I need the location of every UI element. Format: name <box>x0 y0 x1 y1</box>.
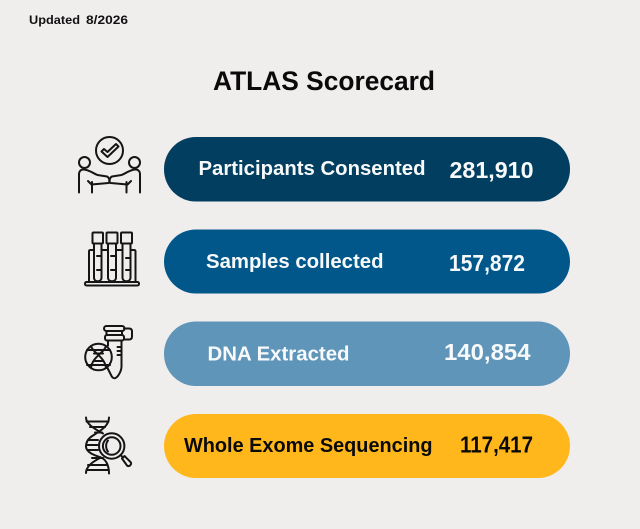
row: participants consented <box>79 137 570 202</box>
value: exome: 117,417 <box>460 432 533 458</box>
icon: test tube rack <box>85 232 139 286</box>
value: DNA: 140,854 <box>444 339 531 365</box>
value: samples: 157,872 <box>449 250 525 276</box>
value: participants: 281,910 <box>450 157 534 183</box>
pill: DNA <box>164 322 570 386</box>
pill: samples <box>164 230 570 294</box>
label: samples collected: Samples collected <box>206 251 384 273</box>
label: participants consented: Participants Consented <box>198 158 426 180</box>
pill: participants <box>164 137 570 202</box>
row: DNA extracted <box>85 322 570 386</box>
icon: handshake with check <box>79 137 140 192</box>
update date <box>29 15 128 27</box>
update date: Updated <box>29 15 80 27</box>
update date: 8/2026 <box>86 15 128 27</box>
icon: DNA with magnifier <box>86 418 131 474</box>
row: samples collected <box>85 230 570 294</box>
row: whole exome sequencing <box>86 414 570 478</box>
icon: DNA sample tube <box>85 326 132 378</box>
title: ATLAS Scorecard <box>213 66 435 96</box>
label: whole exome sequencing: Whole Exome Sequencing <box>184 435 432 457</box>
pill: exome <box>164 414 570 478</box>
label: DNA extracted: DNA Extracted <box>208 344 350 366</box>
